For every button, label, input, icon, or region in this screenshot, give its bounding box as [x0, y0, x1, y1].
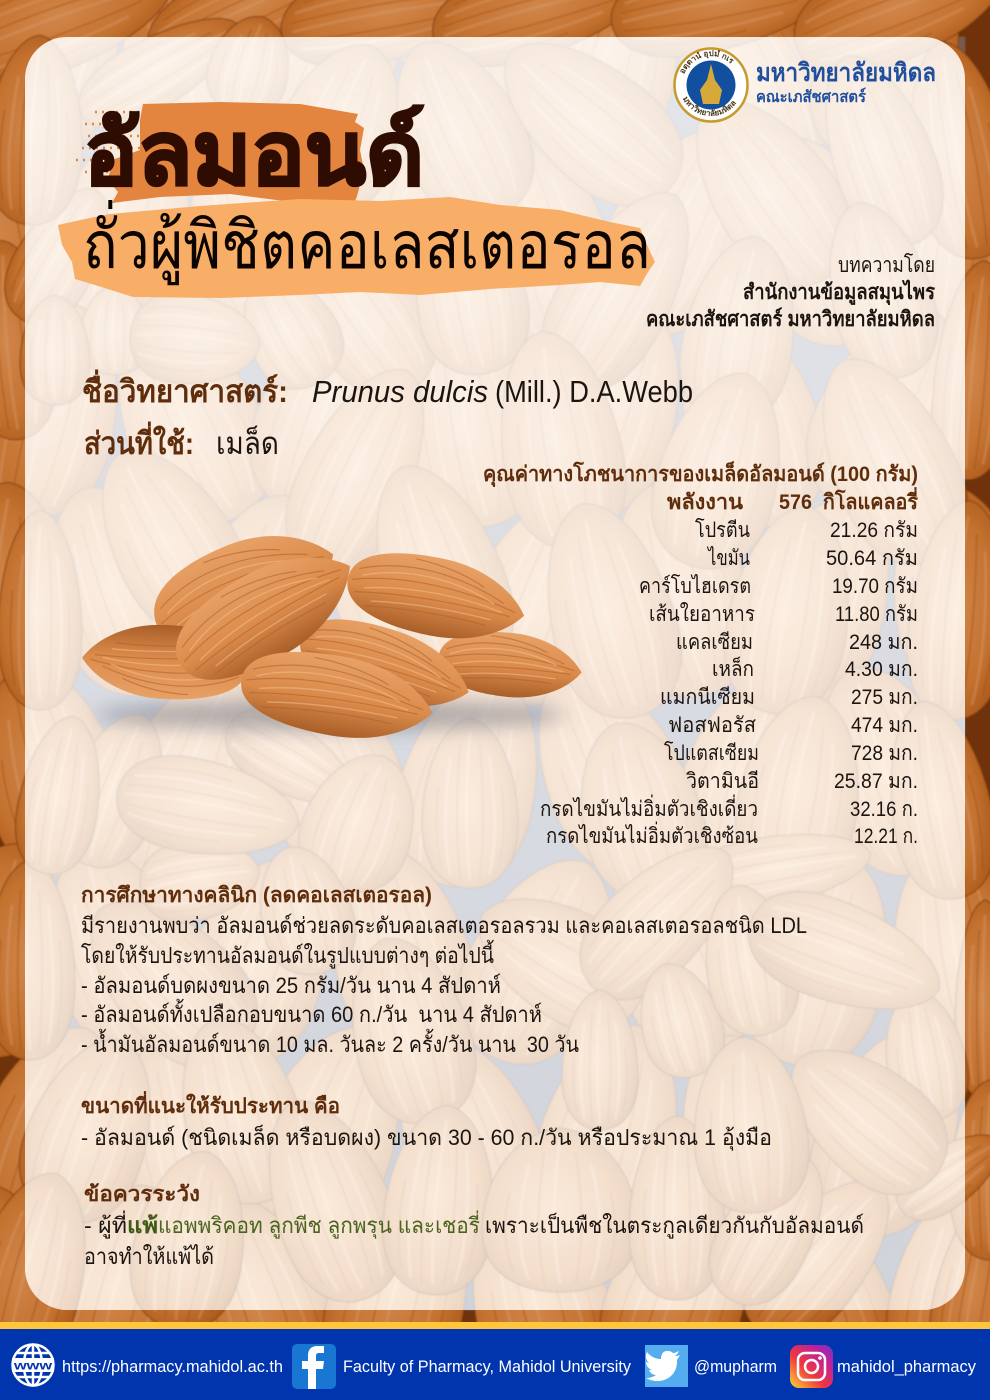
nutrient rows: ฟอสฟอรัส	[668, 714, 756, 737]
nutrient rows: 728 มก.	[851, 742, 918, 765]
logo text: university name: มหาวิทยาลัยมหิดล	[756, 59, 936, 87]
logo: Mahidol University seal: มหาวิทยาลัยมหิดล	[683, 96, 736, 116]
article credit: บทความโดย	[838, 253, 935, 277]
website url: https://pharmacy.mahidol.ac.th	[62, 1357, 283, 1376]
caution section: เพราะเป็นพืชในตระกูลเดียวกันกับอัลมอนด์	[485, 1211, 864, 1239]
nutrient rows: 275 มก.	[851, 686, 918, 709]
clinical studies section: - อัลมอนด์ทั้งเปลือกอบขนาด 60 ก./วัน นาน 4 สัปดาห์	[81, 999, 542, 1027]
nutrient rows: 19.70 กรัม	[832, 575, 918, 598]
nutrient rows	[540, 518, 918, 848]
nutrient rows: แมกนีเซียม	[660, 686, 755, 709]
nutrient rows: 25.87 มก.	[834, 770, 918, 793]
footer bar	[0, 1322, 990, 1400]
clinical studies section: โดยให้รับประทานอัลมอนด์ในรูปแบบต่างๆ ต่อไปนี้	[81, 940, 494, 969]
part used: ส่วนที่ใช้:	[84, 421, 194, 461]
nutrient rows: กรดไขมันไม่อิ่มตัวเชิงซ้อน	[546, 821, 758, 848]
clinical studies section: - น้ำมันอัลมอนด์ขนาด 10 มล. วันละ 2 ครั้ง/วัน นาน 30 วัน	[81, 1029, 579, 1057]
recommended dose section: ขนาดที่แนะให้รับประทาน คือ	[81, 1090, 340, 1118]
clinical studies section	[81, 884, 807, 1057]
logo text: university name	[756, 59, 936, 106]
caution section: แพ้	[127, 1213, 158, 1238]
nutrient rows: 248 มก.	[849, 631, 918, 654]
scientific name: (Mill.) D.A.Webb	[495, 374, 693, 409]
nutrient rows: 32.16 ก.	[850, 798, 918, 821]
icon: website globe: www	[13, 1358, 53, 1372]
clinical studies section: การศึกษาทางคลินิก (ลดคอเลสเตอรอล)	[81, 884, 432, 907]
nutrient rows: กรดไขมันไม่อิ่มตัวเชิงเดี่ยว	[540, 794, 758, 821]
icon: website globe	[12, 1344, 54, 1386]
nutrient rows: 21.26 กรัม	[830, 519, 918, 542]
twitter handle: @mupharm	[694, 1357, 777, 1376]
nutrient rows: เส้นใยอาหาร	[649, 602, 755, 626]
nutrient rows: คาร์โบไฮเดรต	[639, 574, 751, 598]
title: อัลมอนด์	[84, 104, 424, 203]
article credit: คณะเภสัชศาสตร์ มหาวิทยาลัยมหิดล	[646, 307, 935, 331]
caution section: อาจทำให้แพ้ได้	[84, 1244, 214, 1269]
icon: facebook	[292, 1344, 336, 1389]
nutrient rows: โปรตีน	[695, 518, 750, 542]
illustration: pile of almonds	[80, 510, 585, 752]
scientific name: ชื่อวิทยาศาสตร์:	[82, 369, 288, 409]
part used	[84, 421, 279, 461]
nutrient rows: 50.64 กรัม	[826, 547, 918, 570]
nutrient rows: โปแตสเซียม	[664, 741, 759, 765]
subtitle: ถั่วผู้พิชิตคอเลสเตอรอล	[83, 200, 651, 286]
caution section: - ผู้ที่	[84, 1210, 127, 1239]
caution section	[84, 1182, 864, 1269]
caution section: แอพพริคอท ลูกพีช ลูกพรุน และเชอรี่	[158, 1210, 480, 1239]
nutrition table	[483, 460, 919, 848]
logo: Mahidol University seal	[673, 47, 749, 123]
article credit: สำนักงานข้อมูลสมุนไพร	[743, 279, 936, 306]
article credit	[646, 253, 936, 331]
part used: เมล็ด	[216, 425, 279, 461]
icon: twitter	[645, 1345, 688, 1387]
clinical studies section: - อัลมอนด์บดผงขนาด 25 กรัม/วัน นาน 4 สัปดาห์	[81, 973, 501, 998]
clinical studies section: มีรายงานพบว่า อัลมอนด์ช่วยลดระดับคอเลสเตอรอลรวม และคอเลสเตอรอลชนิด LDL	[81, 913, 807, 938]
brush stroke: dark orange behind title	[76, 102, 364, 209]
nutrient rows: ไขมัน	[706, 546, 750, 570]
table heading: คุณค่าทางโภชนาการของเมล็ดอัลมอนด์ (100 กรัม)	[483, 460, 918, 488]
recommended dose section: - อัลมอนด์ (ชนิดเมล็ด หรือบดผง) ขนาด 30 - 60 ก./วัน หรือประมาณ 1 อุ้งมือ	[81, 1123, 772, 1151]
brush stroke: light orange behind subtitle	[58, 197, 655, 298]
logo: Mahidol University seal: อตฺตานํ อุปมํ กเร	[680, 50, 734, 74]
energy row: พลังงาน	[667, 491, 744, 514]
icon: instagram	[790, 1345, 833, 1388]
nutrient rows: 474 มก.	[851, 714, 918, 737]
nutrient rows: เหล็ก	[712, 655, 754, 681]
facebook name: Faculty of Pharmacy, Mahidol University	[343, 1357, 631, 1376]
nutrient rows: วิตามินอี	[686, 770, 759, 793]
nutrient rows: 11.80 กรัม	[835, 603, 918, 626]
scientific name: Prunus dulcis	[312, 374, 488, 409]
scientific name	[82, 369, 693, 409]
energy row	[667, 486, 919, 514]
nutrient rows: 4.30 มก.	[845, 658, 918, 681]
caution section: ข้อควรระวัง	[84, 1182, 200, 1206]
energy row: 576 กิโลแคลอรี่	[779, 486, 919, 514]
recommended dose section	[81, 1090, 772, 1151]
nutrient rows: แคลเซียม	[676, 631, 753, 654]
logo text: university name: คณะเภสัชศาสตร์	[756, 87, 866, 106]
instagram handle: mahidol_pharmacy	[837, 1357, 976, 1376]
nutrient rows: 12.21 ก.	[854, 825, 918, 848]
